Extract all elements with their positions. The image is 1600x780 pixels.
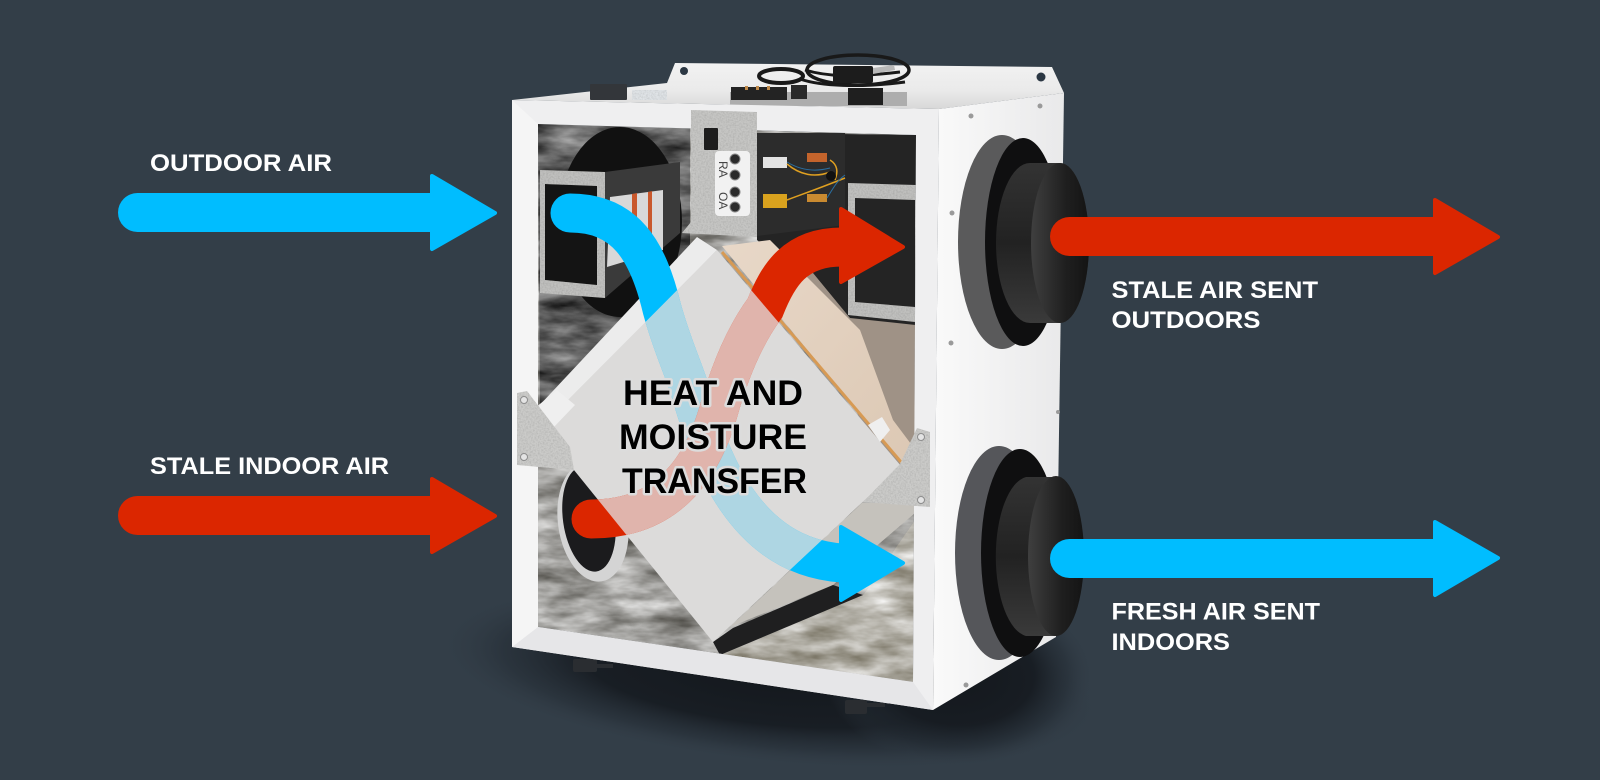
upper right taupe cavity (807, 273, 915, 464)
side screws (948, 104, 1060, 688)
arrow: outdoor air (118, 176, 495, 249)
top clip and speckle (590, 84, 667, 100)
line 2: OUTDOORS (1112, 307, 1260, 334)
lower left duct hole (557, 470, 628, 582)
foil lining (538, 124, 916, 682)
arrow: fresh air sent indoors (1050, 522, 1498, 595)
red path through core (598, 290, 778, 535)
silver trough (730, 503, 915, 627)
red arrowhead (841, 209, 903, 282)
lower duct collar (955, 446, 1084, 660)
upper left dark foil (538, 124, 690, 425)
left bracket (517, 391, 574, 470)
red path solid (591, 247, 842, 519)
ventilator unit (512, 55, 1089, 714)
arrow: stale indoor air (118, 479, 495, 552)
internal red flow (591, 209, 903, 519)
collar mouth (1028, 476, 1084, 636)
collar body (996, 163, 1089, 323)
port label (715, 151, 750, 216)
core label line 3: TRANSFER (622, 462, 807, 501)
port text RA: RA (716, 161, 730, 178)
label: stale air sent outdoors (1112, 277, 1318, 334)
core label line 2: MOISTURE (619, 418, 807, 457)
top electronics and power cord (730, 55, 909, 106)
top face of cabinet (512, 63, 1064, 109)
line 1: FRESH AIR SENT (1112, 598, 1320, 626)
line 1: STALE AIR SENT (1112, 277, 1318, 304)
mounting holes (680, 67, 1046, 82)
flange recess (985, 138, 1061, 346)
left fan frame box side (605, 162, 680, 298)
insulation band (722, 240, 914, 464)
collar mouth (1031, 163, 1089, 323)
label: stale indoor air: STALE INDOOR AIR (150, 453, 389, 480)
ports (730, 154, 740, 212)
blue arrowhead (841, 527, 903, 600)
electrical box (760, 133, 846, 208)
internal blue flow (570, 213, 903, 600)
front frame (512, 100, 939, 710)
line 2: INDOORS (1112, 629, 1230, 656)
interior opening (538, 124, 916, 690)
heat exchanger core (540, 250, 901, 642)
core label line 1: HEAT AND (623, 374, 803, 413)
blue path solid (570, 213, 842, 563)
label: fresh air sent indoors (1112, 598, 1320, 656)
control plate (682, 110, 757, 237)
lower right foil (720, 520, 915, 690)
drop shadow under unit (428, 553, 1112, 780)
upper right dark cavity (757, 133, 916, 330)
label: outdoor air: OUTDOOR AIR (150, 150, 332, 177)
bracket screws (520, 396, 924, 504)
right fan frame (848, 183, 916, 322)
left fan frame (540, 170, 605, 298)
collar body (996, 477, 1081, 636)
left frame inner dark (545, 184, 572, 282)
side face of cabinet (933, 93, 1064, 710)
right bracket (863, 428, 930, 507)
infographic canvas (118, 53, 1500, 754)
arrow: stale air sent outdoors (1050, 200, 1498, 273)
feet (573, 659, 885, 714)
upper left dark fan (558, 127, 682, 317)
flange (958, 135, 1046, 349)
white foam corners (535, 390, 890, 442)
upper duct collar (958, 135, 1089, 349)
switch (704, 128, 718, 150)
white exchanger frame strip (537, 237, 717, 408)
port text OA: OA (716, 192, 730, 209)
core label (619, 374, 807, 501)
flange (955, 446, 1043, 660)
frame inner edge panels (512, 100, 933, 710)
blue path through core (646, 290, 822, 570)
dark trough (713, 585, 863, 655)
flange recess (981, 449, 1059, 657)
orange edge (722, 252, 901, 462)
